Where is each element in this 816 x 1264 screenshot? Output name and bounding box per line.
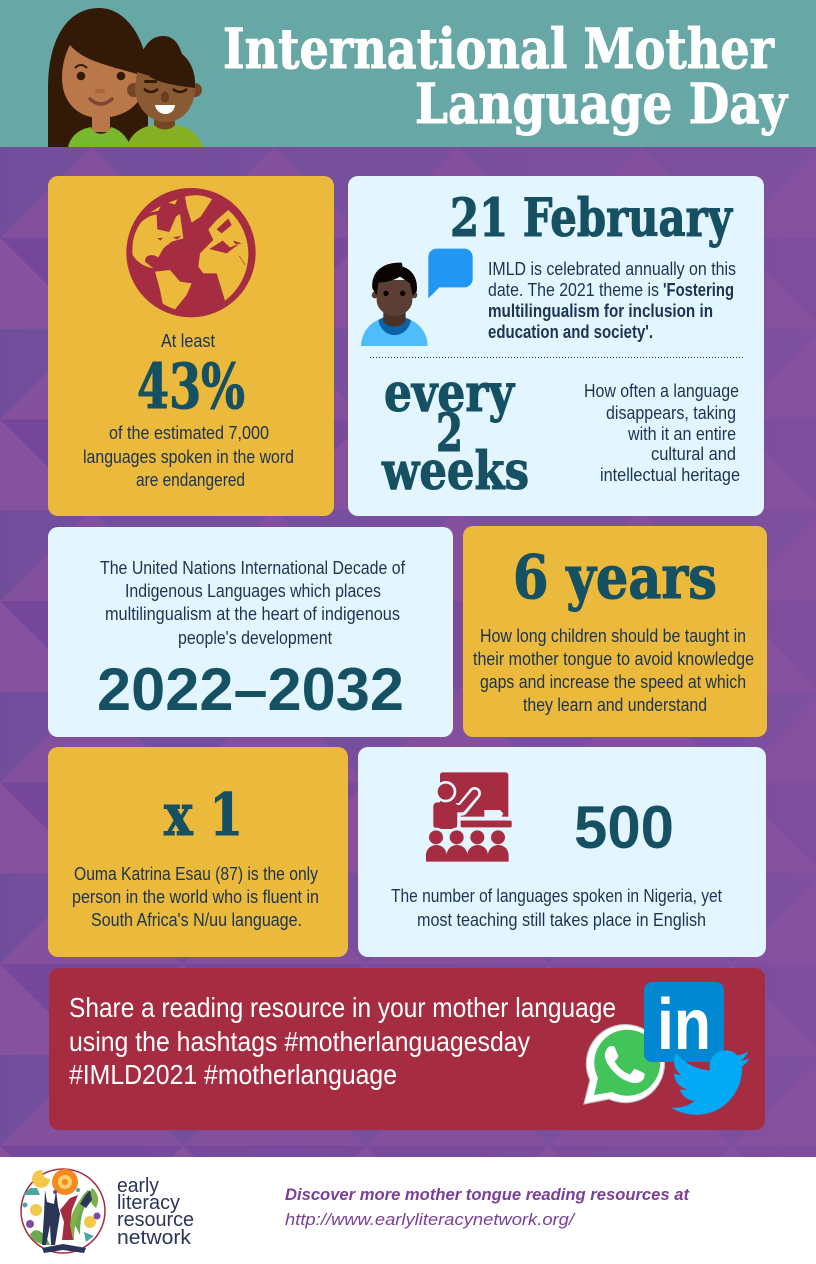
panel: 21 February and every 2 weeks [348,176,764,516]
text: IMLD theme: multilingualism for inclusion in [488,301,713,321]
text: endangered languages: are endangered [136,470,245,490]
stat: every 2 weeks: weeks [381,441,529,502]
text: IMLD theme [488,259,736,342]
icon: globe [126,188,256,317]
logo wordmark: network [117,1227,192,1249]
footer [0,1157,816,1264]
icon: LinkedIn: in [657,985,711,1065]
text: how often a language disappears: with it an entire [627,424,736,444]
stat: 2022-2032: 2022–2032 [97,656,404,723]
text: mother tongue teaching: gaps and increase the speed at which [480,672,746,692]
text: UN decade description: Indigenous Languages which places [125,581,381,601]
text: how often a language disappears: cultural and [651,444,736,464]
purple triangle background [0,147,816,1157]
text: Ouma Katrina Esau: person in the world who is fluent in [72,887,319,907]
text: languages in Nigeria: The number of languages spoken in Nigeria, yet [391,886,722,906]
text: share hashtags: using the hashtags #motherlanguagesday [69,1026,530,1057]
panel: decade of indigenous languages [48,527,453,737]
icon: classroom [426,772,512,862]
panel: 6 years [463,526,767,737]
text: discover more link [285,1185,690,1229]
text: endangered languages: languages spoken in the word [83,447,294,467]
text: UN decade description: The United Nations International Decade of [100,558,406,578]
panel: share call to action [49,968,765,1130]
text: UN decade description: people's development [178,628,332,648]
panel: 43% endangered [48,176,334,516]
text: share hashtags: Share a reading resource in your mother language [69,992,616,1023]
text: how often a language disappears: How often a language [584,381,739,401]
panel: 500 languages in Nigeria [358,747,766,957]
heading: 21 February: 21 February [450,188,733,249]
panel: x 1 [48,747,348,957]
title [223,16,789,136]
stat: every 2 weeks [381,363,529,502]
icon: person speaking [361,249,473,346]
text: how often a language disappears [584,381,740,485]
text: discover more link: http://www.earlyliteracynetwork.org/ [285,1210,576,1229]
text: UN decade description [100,558,406,648]
text: mother tongue teaching [473,626,754,715]
text: IMLD theme: 'Fostering [663,280,734,300]
text: UN decade description: multilingualism at the heart of indigenous [105,604,400,624]
logo wordmark: resource [117,1209,194,1231]
text: IMLD theme: date. The 2021 theme is [488,280,659,300]
text: how often a language disappears: disappears, taking [606,403,736,423]
stat: every 2 weeks: 2 [436,403,463,464]
text: languages in Nigeria: most teaching still takes place in English [417,910,706,930]
stat: 43%: 43% [137,350,245,423]
text: mother tongue teaching: their mother tongue to avoid knowledge [473,649,754,669]
text: Ouma Katrina Esau: Ouma Katrina Esau (87) is the only [74,864,318,884]
text: mother tongue teaching: How long children should be taught in [480,626,746,646]
text: discover more link: Discover more mother tongue reading resources at [285,1185,690,1204]
text: endangered languages: of the estimated 7,000 [109,423,269,443]
stat: every 2 weeks: every [384,363,516,424]
header band [0,0,816,147]
icon: mother and child [48,8,203,147]
text: share hashtags [69,992,616,1090]
text: at least: At least [161,331,215,351]
stat: 500: 500 [574,794,674,861]
text: languages in Nigeria [391,886,722,930]
icon: Twitter [671,1050,750,1115]
logo: early literacy resource network [21,1169,105,1253]
text: endangered languages [83,423,294,490]
text: IMLD theme: education and society'. [488,322,653,342]
text: share hashtags: #IMLD2021 #motherlanguage [69,1059,397,1090]
logo wordmark: early [117,1175,159,1197]
stat: 6 years: 6 years [513,543,717,613]
text: Ouma Katrina Esau: South Africa's N/uu language. [91,910,302,930]
text: mother tongue teaching: they learn and understand [523,695,707,715]
text: IMLD theme: IMLD is celebrated annually on this [488,259,736,279]
stat: x 1: x 1 [164,781,243,849]
text: how often a language disappears: intellectual heritage [600,465,740,485]
logo wordmark [117,1175,194,1249]
logo wordmark: literacy [117,1192,180,1214]
text: Ouma Katrina Esau [72,864,319,930]
icon: WhatsApp [584,1025,664,1104]
